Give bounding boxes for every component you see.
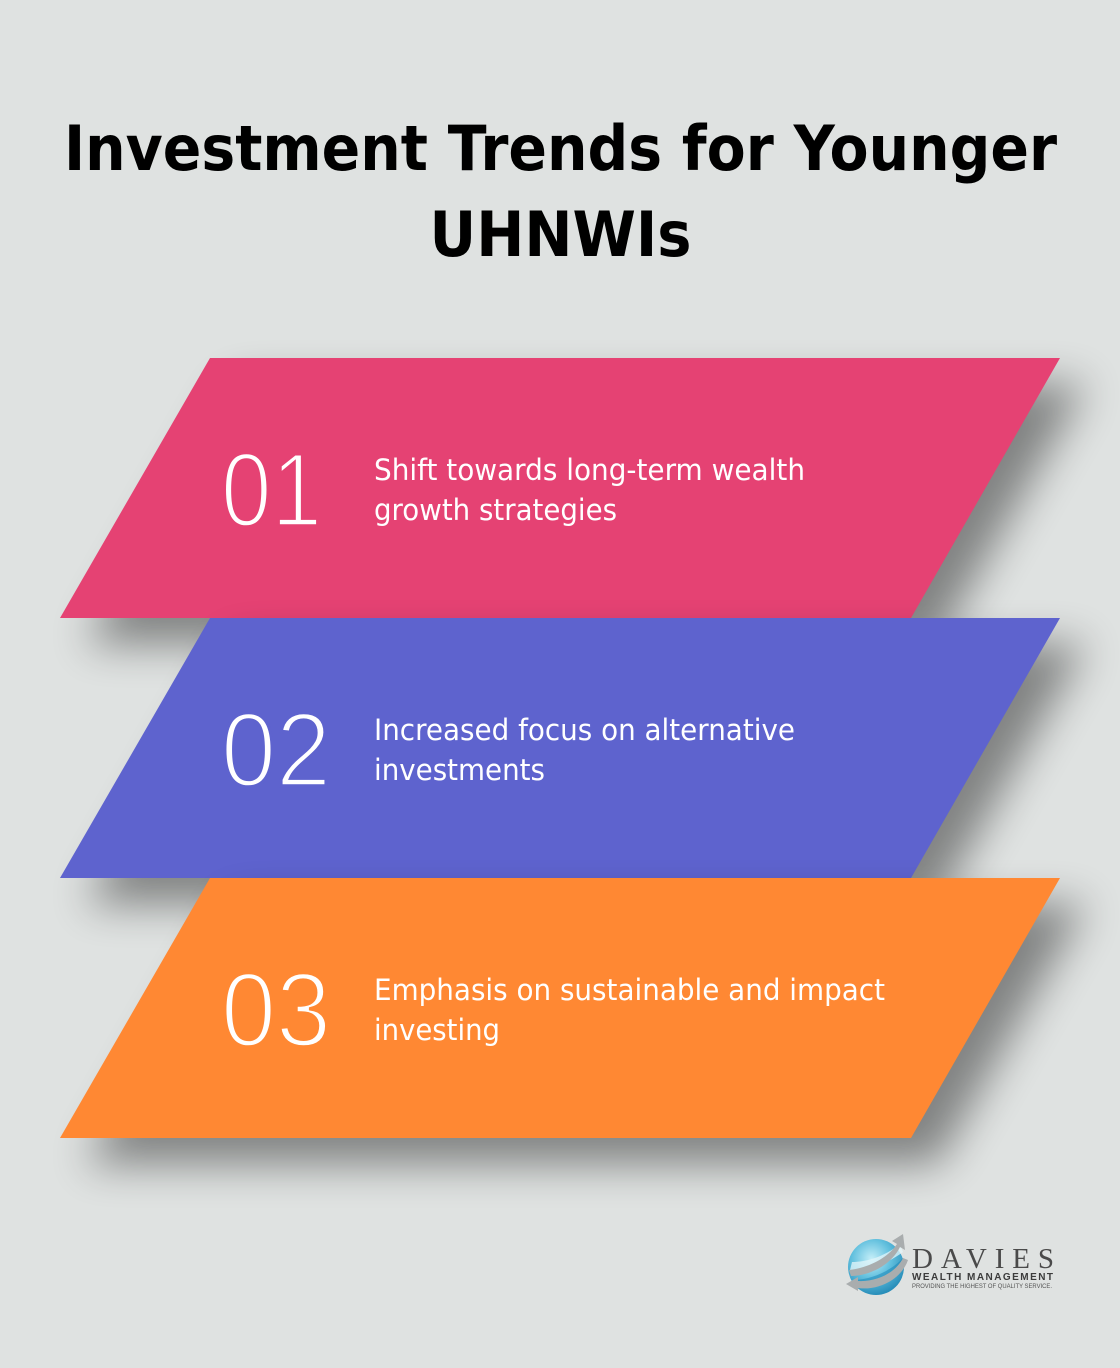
text: item 03: investing	[374, 1013, 500, 1047]
text: item 01: Shift towards long-term wealth	[374, 453, 805, 487]
text: item 03: Emphasis on sustainable and impact	[374, 973, 885, 1007]
title: Investment Trends for Younger	[64, 112, 1057, 185]
title	[64, 112, 1057, 271]
panel: item 03	[60, 878, 1086, 1164]
panel: item 01	[60, 358, 1086, 644]
icon: globe with arrows	[846, 1234, 908, 1295]
text: item 01: growth strategies	[374, 493, 617, 527]
number 02: 02	[221, 692, 331, 809]
subtitle: WEALTH MANAGEMENT	[912, 1272, 1053, 1283]
text: item 02: Increased focus on alternative	[374, 713, 795, 747]
title: UHNWIs	[430, 198, 692, 271]
tagline: PROVIDING THE HIGHEST OF QUALITY SERVICE.	[912, 1283, 1052, 1290]
text: item 02: investments	[374, 753, 545, 787]
banner: pink	[60, 358, 1060, 618]
banner: orange	[60, 878, 1060, 1138]
wordmark: DAVIES	[912, 1243, 1054, 1275]
number 01: 01	[221, 432, 322, 549]
logo: Davies Wealth Management	[846, 1234, 1054, 1295]
number 03: 03	[221, 952, 331, 1069]
banner: blue	[60, 618, 1060, 878]
panel: item 02	[60, 618, 1086, 904]
